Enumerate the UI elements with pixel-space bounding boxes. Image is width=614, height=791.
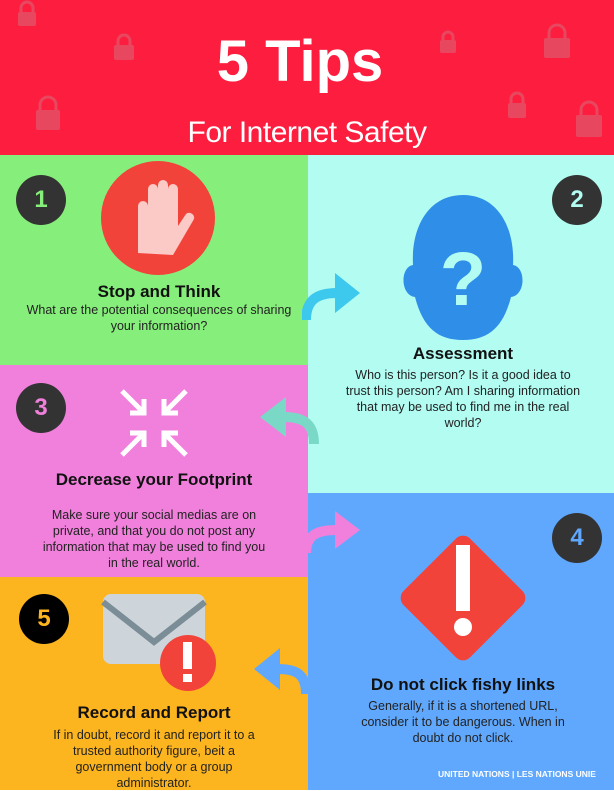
arrow: 2 to 3 [260,397,319,444]
number 4: 4 [570,524,584,551]
text: Who is this person? Is it a good idea to [355,368,571,382]
text: doubt do not click. [413,731,513,745]
text: Make sure your social medias are on [52,508,256,522]
arrow: 1 to 2 [302,273,360,320]
footer credit: UNITED NATIONS | LES NATIONS UNIE [438,769,596,779]
icon: stop hand [101,161,215,275]
text: administrator. [116,776,192,790]
header [0,0,614,155]
panel: tip 2 [308,155,614,493]
icon: envelope with alert [101,594,216,691]
text: What are the potential consequences of sharing [27,303,291,317]
text [26,303,291,333]
text: private, and that you do not post any [53,524,255,538]
title: 5 Tips [217,29,383,94]
heading: Do not click fishy links [371,675,555,694]
text: Generally, if it is a shortened URL, [368,699,558,713]
lock icons [18,0,602,137]
text: information that may be used to find you [43,540,265,554]
text: trusted authority figure, beit a [73,744,235,758]
number 5: 5 [37,605,51,632]
panel: tip 1 [0,155,308,365]
panel: tip 4 [308,493,614,790]
arrow: 3 to 4 [308,511,360,553]
text: trust this person? Am I sharing information [346,384,580,398]
heading: Decrease your Footprint [56,470,252,489]
panel: tip 3 [0,365,308,577]
text: in the real world. [108,556,200,570]
number 1: 1 [34,186,48,213]
text: consider it to be dangerous. When in [361,715,565,729]
text: world? [445,416,481,430]
heading: Stop and Think [98,282,220,301]
number 4 [552,513,602,563]
number 3 [16,383,66,433]
icon: warning diamond [400,536,526,660]
number 3: 3 [34,394,48,421]
text [53,728,255,790]
panel: tip 5 [0,577,308,790]
number 2 [552,175,602,225]
text: that may be used to find me in the real [357,400,569,414]
text [361,699,565,745]
icon: head with question: ? [440,237,486,322]
arrow: 4 to 5 [254,648,308,694]
text [346,368,580,430]
number 5 [19,594,69,644]
heading: Record and Report [77,703,231,722]
text: If in doubt, record it and report it to a [53,728,255,742]
number 1 [16,175,66,225]
text [43,508,265,570]
heading: Assessment [413,344,513,363]
text: government body or a group [75,760,233,774]
text: your information? [111,319,207,333]
subtitle: For Internet Safety [188,116,426,149]
number 2: 2 [570,186,584,213]
icon: head with question [404,195,522,340]
icon: shrink arrows [120,389,188,457]
